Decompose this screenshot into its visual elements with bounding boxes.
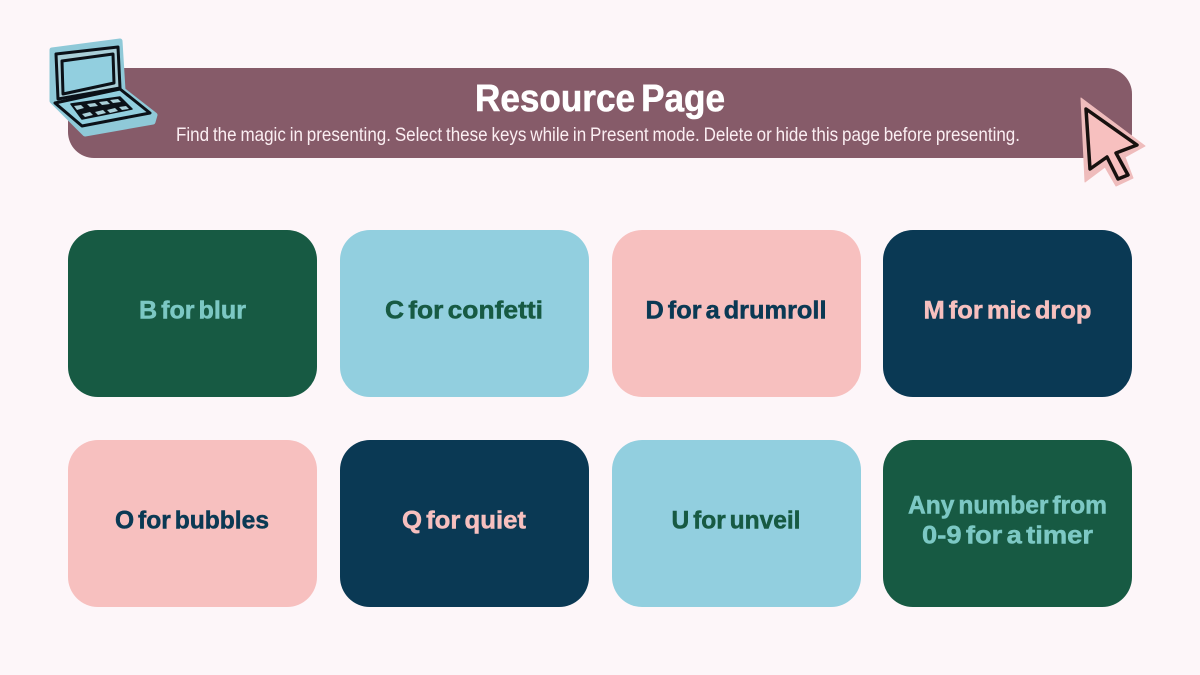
card: M for mic drop xyxy=(883,230,1132,397)
card: C for confetti xyxy=(340,230,589,397)
title: Resource Page xyxy=(475,78,725,120)
card: D for a drumroll xyxy=(612,230,861,397)
card: O for bubbles: O for bubbles xyxy=(115,506,269,534)
header banner xyxy=(68,68,1132,158)
card: M for mic drop: M for mic drop xyxy=(924,296,1092,324)
card: any number timer xyxy=(883,440,1132,607)
icon: laptop xyxy=(52,41,155,134)
card: U for unveil: U for unveil xyxy=(672,506,800,534)
card: B for blur: B for blur xyxy=(139,296,246,324)
icon: cursor arrow xyxy=(1081,98,1145,186)
card: any number timer: 0-9 for a timer xyxy=(922,522,1093,550)
card: B for blur xyxy=(68,230,317,397)
card: D for a drumroll: D for a drumroll xyxy=(646,296,826,324)
card: C for confetti: C for confetti xyxy=(385,296,543,324)
card: Q for quiet: Q for quiet xyxy=(402,506,527,534)
card: any number timer: Any number from xyxy=(908,492,1107,520)
subtitle: Find the magic in presenting. Select these keys while in Present mode. Delete or hide this page before presenting. xyxy=(176,124,1020,146)
card: U for unveil xyxy=(612,440,861,607)
card: Q for quiet xyxy=(340,440,589,607)
card: O for bubbles xyxy=(68,440,317,607)
